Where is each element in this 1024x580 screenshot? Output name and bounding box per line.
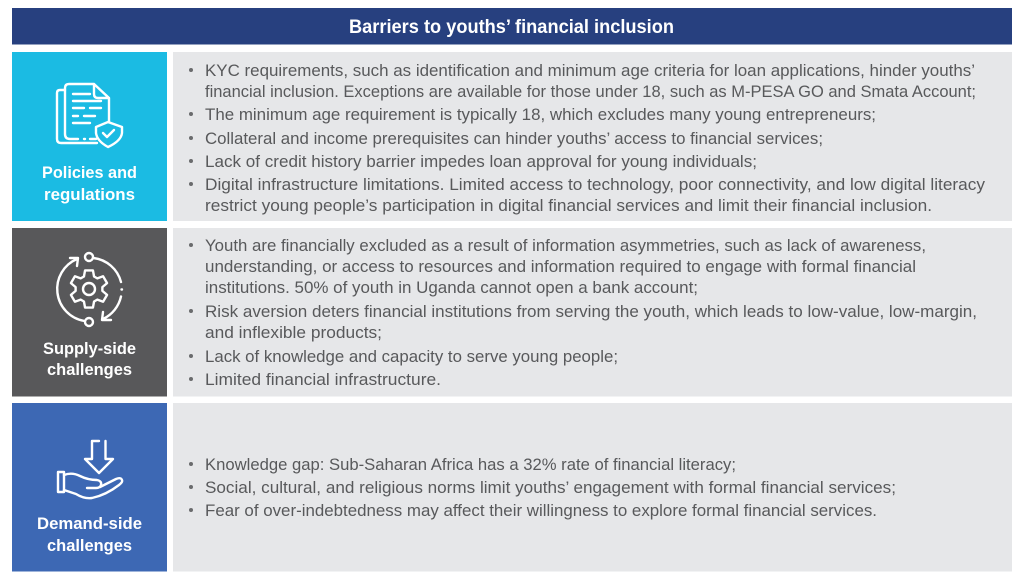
icon: hand receiving arrow — [58, 441, 122, 498]
heading: demand-side challenges: challenges — [47, 537, 132, 555]
label tile: demand-side challenges — [12, 403, 167, 572]
text panel: demand-side challenges — [173, 403, 1012, 572]
heading: policies and regulations: Policies and — [42, 164, 137, 182]
panel: policies and regulations — [12, 52, 167, 221]
text panel: demand-side challenges: Social, cultural, and religious norms limit youths’ engagement with formal financial services; — [205, 478, 896, 497]
icon: gear with cycle arrows — [57, 253, 122, 326]
heading: demand-side challenges — [37, 515, 142, 555]
text panel: policies and regulations — [173, 52, 1012, 221]
text panel: supply-side challenges: Limited financial infrastructure. — [205, 370, 441, 389]
text panel: demand-side challenges: Fear of over-indebtedness may affect their willingness to explore formal financial services. — [205, 501, 877, 520]
label tile: policies and regulations — [12, 52, 167, 221]
text panel: supply-side challenges: Youth are financially excluded as a result of information asymmetries, such as lack of awareness, — [205, 236, 926, 255]
text panel: supply-side challenges: understanding, or access to resources and information required to engage with formal financial — [205, 257, 916, 276]
panel: supply-side challenges — [12, 228, 167, 396]
text panel: demand-side challenges: Knowledge gap: Sub-Saharan Africa has a 32% rate of financial literacy; — [205, 455, 736, 474]
text panel: supply-side challenges: Risk aversion deters financial institutions from serving the youth, which leads to low-value, low-margin, — [205, 302, 977, 321]
text panel: policies and regulations: Digital infrastructure limitations. Limited access to technology, poor connectivity, and low digital literacy — [205, 175, 985, 194]
heading: supply-side challenges — [43, 340, 136, 379]
title — [12, 8, 1012, 44]
text panel: supply-side challenges — [173, 228, 1012, 396]
text panel: policies and regulations: restrict young people’s participation in digital financial services and limit their financial inclusion. — [205, 196, 932, 215]
text panel: supply-side challenges: and inflexible products; — [205, 323, 382, 342]
text panel: policies and regulations: The minimum age requirement is typically 18, which excludes many young entrepreneurs; — [205, 105, 876, 124]
heading: policies and regulations — [42, 164, 137, 204]
label tile: supply-side challenges — [12, 228, 167, 396]
panel: demand-side challenges — [12, 403, 167, 572]
text panel: supply-side challenges: Lack of knowledge and capacity to serve young people; — [205, 347, 618, 366]
text panel: supply-side challenges: institutions. 50% of youth in Uganda cannot open a bank account; — [205, 278, 698, 297]
icon: document with shield — [57, 84, 122, 147]
heading: supply-side challenges: challenges — [47, 361, 132, 379]
heading: policies and regulations: regulations — [44, 186, 135, 204]
heading: demand-side challenges: Demand-side — [37, 515, 142, 533]
text panel: policies and regulations: financial inclusion. Exceptions are available for those under 18, such as M-PESA GO and Smata Account; — [205, 82, 976, 101]
text panel: policies and regulations: KYC requirements, such as identification and minimum age criteria for loan applications, hinder youths’ — [205, 61, 975, 80]
heading: supply-side challenges: Supply-side — [43, 340, 136, 358]
text panel: policies and regulations: Lack of credit history barrier impedes loan approval for young individuals; — [205, 152, 757, 171]
text panel: policies and regulations: Collateral and income prerequisites can hinder youths’ access to financial services; — [205, 129, 823, 148]
title: Barriers to youths’ financial inclusion — [349, 17, 674, 38]
